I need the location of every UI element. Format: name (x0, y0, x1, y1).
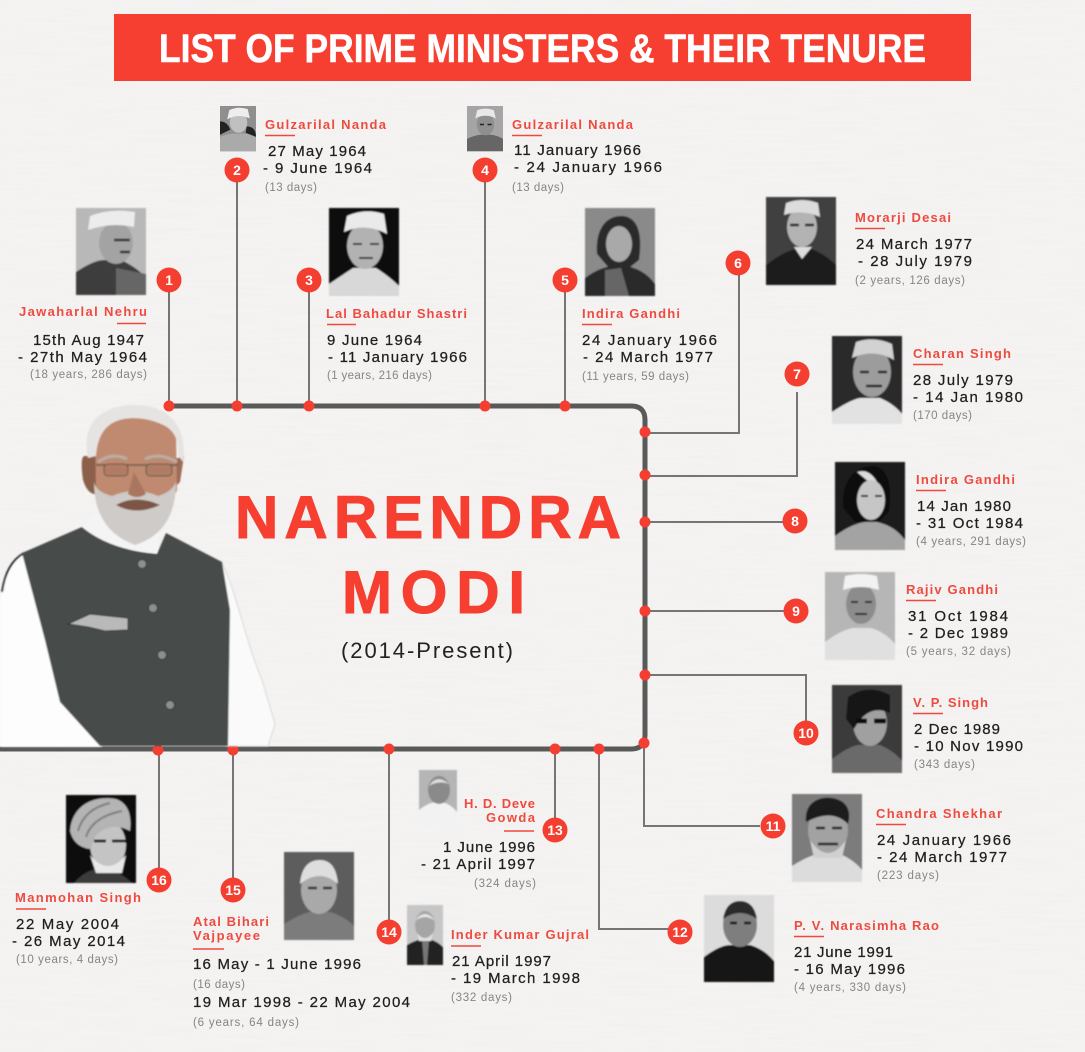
name and tenure: 11 January 1966 (514, 142, 641, 159)
portrait: Narasimha Rao (704, 895, 774, 982)
name and tenure (193, 914, 410, 1029)
name and tenure: Gulzarilal Nanda (265, 117, 387, 132)
marker 1: 1 (165, 272, 173, 288)
name and tenure: 19 Mar 1998 - 22 May 2004 (193, 994, 410, 1011)
portrait: Shastri (329, 208, 399, 296)
entry 7: Charan Singh (784, 336, 1023, 424)
name and tenure: Rajiv Gandhi (906, 582, 998, 597)
name and tenure: Morarji Desai (855, 210, 951, 225)
center heading: Narendra Modi: NARENDRA (235, 484, 621, 551)
name and tenure (326, 306, 467, 382)
name and tenure: 28 July 1979 (913, 372, 1013, 389)
name and tenure (263, 117, 387, 194)
name and tenure: 14 Jan 1980 (917, 498, 1011, 515)
title banner: LIST OF PRIME MINISTERS & THEIR TENURE (159, 27, 926, 71)
name and tenure: 27 May 1964 (268, 143, 366, 160)
entry 13: H. D. Deve Gowda (419, 770, 568, 890)
name and tenure: Manmohan Singh (15, 890, 141, 905)
name and tenure: P. V. Narasimha Rao (794, 918, 939, 933)
name and tenure: (4 years, 330 days) (794, 982, 906, 994)
marker 11 (760, 814, 786, 838)
name and tenure: 21 April 1997 (452, 953, 551, 970)
name and tenure (18, 304, 147, 381)
marker 2 (224, 158, 250, 182)
center heading: Narendra Modi: (2014-Present) (341, 638, 513, 663)
entry 6: Morarji Desai (726, 197, 972, 287)
name and tenure: (10 years, 4 days) (16, 954, 118, 966)
marker 2: 2 (233, 162, 241, 178)
marker 12 (668, 920, 692, 944)
marker 13: 13 (547, 822, 563, 838)
marker 4 (472, 158, 498, 182)
marker 14: 14 (381, 924, 397, 940)
portrait: Gujral (407, 905, 443, 965)
name and tenure: (1 years, 216 days) (327, 370, 432, 382)
name and tenure: (5 years, 32 days) (906, 646, 1011, 658)
entry 11: Chandra Shekhar (760, 794, 1011, 882)
name and tenure: (324 days) (474, 878, 536, 890)
marker 10: 10 (798, 725, 814, 741)
name and tenure: 16 May - 1 June 1996 (193, 956, 361, 973)
name and tenure: - 26 May 2014 (12, 933, 125, 950)
name and tenure: - 19 March 1998 (451, 970, 580, 987)
name and tenure: (2 years, 126 days) (855, 275, 965, 287)
marker 14 (376, 920, 402, 944)
marker 16: 16 (151, 872, 167, 888)
name and tenure: (6 years, 64 days) (193, 1017, 299, 1029)
portrait: Deve Gowda (419, 770, 457, 828)
name and tenure (794, 918, 939, 994)
name and tenure: - 28 July 1979 (858, 253, 972, 270)
portrait: Indira Gandhi (585, 208, 655, 296)
entry 14: Inder Kumar Gujral (376, 905, 589, 1004)
marker 15: 15 (225, 882, 241, 898)
name and tenure: - 10 Nov 1990 (914, 738, 1023, 755)
marker 16 (146, 868, 172, 892)
entry 9: Rajiv Gandhi (784, 572, 1011, 660)
marker 10 (794, 720, 818, 746)
entry 4: Gulzarilal Nanda second term (467, 106, 662, 194)
marker 3: 3 (305, 272, 313, 288)
entry 8: Indira Gandhi second term (782, 462, 1026, 550)
center heading: Narendra Modi (235, 484, 621, 663)
name and tenure: Charan Singh (913, 346, 1011, 361)
marker 15 (220, 878, 246, 902)
name and tenure (421, 796, 536, 890)
name and tenure (876, 806, 1011, 882)
marker 13 (542, 818, 568, 842)
marker 5 (552, 268, 578, 292)
name and tenure: - 24 March 1977 (583, 349, 713, 366)
name and tenure: - 9 June 1964 (263, 160, 372, 177)
name and tenure: 22 May 2004 (16, 916, 119, 933)
name and tenure: (13 days) (512, 182, 564, 194)
name and tenure: (4 years, 291 days) (916, 536, 1026, 548)
marker 8 (782, 508, 808, 534)
portrait: Nanda (220, 106, 256, 151)
entry 16: Manmohan Singh (12, 795, 172, 966)
name and tenure: V. P. Singh (913, 695, 988, 710)
name and tenure: 31 Oct 1984 (908, 608, 1008, 625)
name and tenure: - 14 Jan 1980 (913, 389, 1023, 406)
portrait: Chandra Shekhar (792, 794, 862, 882)
name and tenure (582, 306, 717, 383)
name and tenure (12, 890, 141, 966)
marker 5: 5 (561, 272, 569, 288)
marker 9: 9 (792, 603, 800, 619)
name and tenure: Indira Gandhi (582, 306, 680, 321)
portrait: Narendra Modi (0, 405, 275, 747)
name and tenure: (11 years, 59 days) (582, 371, 689, 383)
portrait: Morarji Desai (766, 197, 836, 285)
name and tenure (906, 582, 1011, 658)
portrait: Manmohan Singh (66, 795, 136, 883)
name and tenure (916, 472, 1026, 548)
marker 7 (784, 362, 810, 386)
marker 6 (726, 250, 750, 276)
portrait: Vajpayee (284, 852, 354, 940)
title banner (114, 14, 971, 81)
name and tenure: (16 days) (193, 979, 245, 991)
name and tenure: Lal Bahadur Shastri (326, 306, 467, 321)
center heading: Narendra Modi: MODI (342, 559, 525, 626)
portrait: Charan Singh (832, 336, 902, 424)
name and tenure: Vajpayee (193, 928, 260, 943)
marker 4: 4 (481, 162, 489, 178)
name and tenure: 21 June 1991 (794, 944, 893, 961)
name and tenure: 15th Aug 1947 (33, 332, 144, 349)
name and tenure: (223 days) (877, 870, 939, 882)
entry 15: Atal Bihari Vajpayee (193, 852, 410, 1029)
name and tenure: - 24 January 1966 (514, 159, 662, 176)
name and tenure: H. D. Deve (464, 796, 535, 811)
entry 10: V. P. Singh (794, 685, 1023, 773)
name and tenure: - 27th May 1964 (18, 349, 147, 366)
name and tenure: - 21 April 1997 (421, 856, 535, 873)
marker 3 (296, 268, 322, 292)
entry 12: P. V. Narasimha Rao (668, 895, 939, 994)
name and tenure (512, 117, 662, 194)
portrait: Indira Gandhi (835, 462, 905, 550)
marker 8: 8 (791, 513, 799, 529)
name and tenure (451, 927, 589, 1004)
name and tenure: Gowda (486, 810, 536, 825)
name and tenure: - 2 Dec 1989 (908, 625, 1008, 642)
name and tenure: - 11 January 1966 (328, 349, 467, 366)
marker 1 (156, 268, 182, 292)
entry 1: Jawaharlal Nehru (18, 208, 182, 381)
portrait: Rajiv Gandhi (825, 572, 895, 660)
name and tenure (913, 346, 1023, 422)
entry 5: Indira Gandhi first term (552, 208, 717, 383)
marker 9 (784, 598, 808, 624)
name and tenure: 24 March 1977 (856, 236, 972, 253)
name and tenure: (170 days) (913, 410, 972, 422)
name and tenure (913, 695, 1023, 771)
name and tenure: Gulzarilal Nanda (512, 117, 634, 132)
name and tenure: (13 days) (265, 182, 317, 194)
timeline lines and junction dots (0, 182, 806, 929)
portrait: Nehru (76, 208, 146, 295)
marker 7: 7 (793, 366, 801, 382)
name and tenure: - 31 Oct 1984 (916, 515, 1023, 532)
name and tenure: 1 June 1996 (443, 839, 535, 856)
marker 6: 6 (734, 255, 742, 271)
portrait: Nanda (467, 106, 503, 151)
name and tenure: Indira Gandhi (916, 472, 1015, 487)
name and tenure: 24 January 1966 (582, 332, 717, 349)
name and tenure (855, 210, 972, 287)
marker 11: 11 (766, 818, 781, 834)
marker 12: 12 (672, 924, 688, 940)
name and tenure: Jawaharlal Nehru (19, 304, 147, 319)
entry 3: Lal Bahadur Shastri (296, 208, 467, 382)
name and tenure: - 16 May 1996 (794, 961, 905, 978)
name and tenure: (343 days) (914, 759, 975, 771)
name and tenure: 9 June 1964 (327, 332, 422, 349)
entry 2: Gulzarilal Nanda first term (220, 106, 387, 194)
name and tenure: Chandra Shekhar (876, 806, 1002, 821)
portrait: V. P. Singh (832, 685, 902, 773)
name and tenure: - 24 March 1977 (877, 849, 1007, 866)
name and tenure: Atal Bihari (193, 914, 269, 929)
name and tenure: (18 years, 286 days) (30, 369, 147, 381)
name and tenure: (332 days) (451, 992, 512, 1004)
name and tenure: 24 January 1966 (877, 832, 1011, 849)
name and tenure: 2 Dec 1989 (914, 721, 1000, 738)
name and tenure: Inder Kumar Gujral (451, 927, 589, 942)
